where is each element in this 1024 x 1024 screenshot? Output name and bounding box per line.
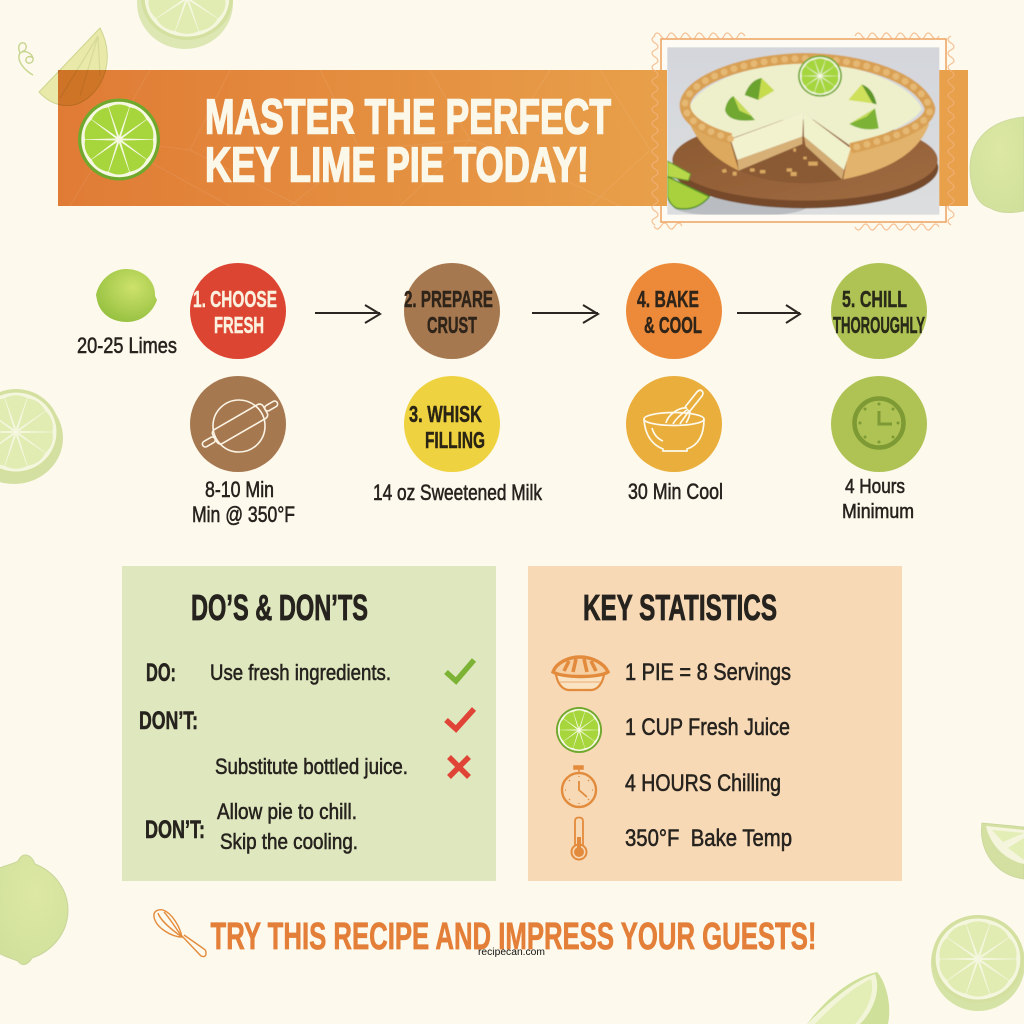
step 2: 2. PREPARE [404, 286, 493, 312]
icon: bowl and whisk [626, 376, 723, 504]
text: substitute: Substitute bottled juice. [215, 754, 408, 779]
step 3 [373, 376, 543, 505]
stat lines: 1 PIE = 8 Servings [625, 659, 791, 686]
icon: red cross [449, 757, 469, 777]
stat lines: 1 CUP Fresh Juice [625, 714, 790, 741]
icon: red check [446, 709, 474, 729]
step 1: FRESH [214, 312, 264, 338]
panel: key statistics [528, 566, 902, 881]
icon: rolling pin: Min @ 350°F [192, 502, 295, 527]
ingredient: lime: 20-25 Limes [77, 333, 177, 358]
step 5 [831, 263, 927, 359]
row: don't skip: DON’T: [145, 816, 205, 844]
heading: do's and don'ts: DO’S & DON’TS [191, 587, 368, 628]
step 1: 1. CHOOSE [193, 286, 277, 312]
arrow 1 [315, 305, 380, 323]
decorative lime: right half-moon [981, 823, 1024, 879]
icon: lime slice [556, 707, 602, 753]
icon: whisk [154, 910, 206, 957]
step 2: CRUST [427, 312, 477, 338]
step 5: 5. CHILL [842, 286, 907, 312]
panel: do's and don'ts [122, 566, 496, 881]
stat lines: 350°F Bake Temp [625, 825, 792, 852]
icon: clock: 4 Hours [845, 476, 905, 498]
step 4 [626, 263, 722, 359]
step 5: THOROUGHLY [833, 312, 925, 338]
icon: green check [446, 660, 474, 681]
row: do: DO: [146, 659, 176, 687]
decorative lime: right whole [970, 117, 1024, 213]
arrow 2 [532, 305, 598, 323]
decorative curl [19, 43, 33, 75]
icon: stopwatch [562, 766, 596, 807]
decorative lime wedge over banner [39, 28, 107, 106]
decorative lime: bottom-right slice [931, 915, 1024, 1011]
arrow 3 [737, 305, 800, 323]
icon: rolling pin [190, 376, 295, 527]
decorative lime: top half slice [137, 0, 233, 49]
title: KEY LIME PIE TODAY! [205, 138, 589, 192]
heading: key statistics: KEY STATISTICS [583, 587, 777, 628]
icon: banner lime slice [78, 98, 160, 180]
row: don't skip [145, 799, 358, 854]
row: do: Use fresh ingredients. [210, 660, 391, 685]
step 4: & COOL [644, 312, 702, 338]
frame scroll ornaments [652, 33, 954, 230]
step 2 [404, 263, 500, 359]
label: don't: DON’T: [139, 707, 198, 735]
icon: clock [831, 376, 927, 523]
decorative lime: bottom-left whole [0, 855, 68, 965]
row: don't skip: Skip the cooling. [220, 829, 358, 854]
title: MASTER THE PERFECT [205, 90, 611, 144]
icon: thermometer [572, 818, 586, 860]
decorative lime: bottom half slice [807, 972, 889, 1024]
row: don't skip: Allow pie to chill. [217, 799, 357, 824]
stat lines [625, 659, 792, 852]
stat lines: 4 HOURS Chilling [625, 770, 781, 797]
title [205, 90, 611, 192]
icon: rolling pin: 8-10 Min [205, 477, 274, 502]
photo frame matte [661, 39, 946, 222]
step 1 [190, 263, 286, 359]
step 3: 3. WHISK [409, 401, 482, 427]
step 4: 4. BAKE [637, 286, 699, 312]
icon: pie [553, 657, 608, 690]
step 3: FILLING [425, 427, 485, 453]
watermark: recipecan.com [478, 947, 545, 958]
step 3: 14 oz Sweetened Milk [373, 480, 543, 505]
icon: clock: Minimum [842, 501, 914, 523]
row: do [146, 659, 391, 687]
icon: bowl and whisk: 30 Min Cool [628, 479, 723, 504]
photo: key lime pie [663, 43, 943, 219]
ingredient: lime [77, 269, 177, 358]
decorative lime: left slice [0, 389, 63, 484]
header banner [58, 70, 968, 206]
